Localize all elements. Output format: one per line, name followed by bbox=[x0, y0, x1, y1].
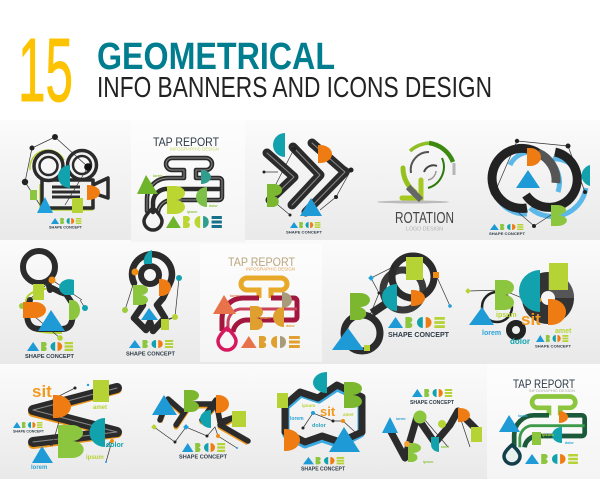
logo row bbox=[241, 336, 300, 348]
logo row bbox=[27, 342, 73, 351]
panel: S ribbon: ipsum bbox=[86, 455, 104, 461]
panel: camera icon bbox=[22, 134, 108, 230]
panel: interlocked circles bbox=[489, 139, 590, 236]
caption: SHAPE CONCEPT bbox=[126, 352, 176, 358]
logo row bbox=[51, 218, 81, 224]
panel: tap report warm: dolor bbox=[286, 324, 295, 328]
big number 15: 15 bbox=[18, 21, 73, 121]
subheading: INFO BANNERS AND ICONS DESIGN bbox=[97, 72, 492, 104]
caption: SHAPE CONCEPT bbox=[13, 428, 44, 434]
panel: hexagon frame: amet bbox=[343, 412, 354, 417]
panel: tap report green: dolor bbox=[209, 204, 218, 208]
panel: chevrons bbox=[262, 133, 354, 234]
panel: pie ring: sit bbox=[521, 310, 541, 329]
caption: SHAPE CONCEPT bbox=[388, 332, 450, 339]
panel: S ribbon: sit bbox=[32, 382, 52, 401]
panel: S ribbon: lorem bbox=[31, 465, 47, 471]
panel: pie ring: lorem bbox=[482, 330, 501, 337]
caption: SHAPE CONCEPT bbox=[286, 230, 323, 234]
panel: tap report blue green: dolor bbox=[565, 441, 574, 445]
caption: SHAPE CONCEPT bbox=[301, 466, 345, 472]
tap pipe bbox=[514, 397, 585, 447]
caption: SHAPE CONCEPT bbox=[25, 354, 75, 360]
logo row bbox=[13, 422, 42, 428]
panel: wave: ipsum bbox=[423, 460, 433, 464]
panel: key shape bbox=[122, 250, 182, 358]
caption: SHAPE CONCEPT bbox=[49, 224, 83, 230]
logo row bbox=[290, 222, 320, 228]
logo row bbox=[388, 317, 445, 328]
panel: tap report warm: lorem bbox=[230, 294, 240, 298]
panel: tap report green bbox=[137, 135, 222, 230]
panel: pie ring: ipsum bbox=[496, 312, 517, 319]
panel: pie ring bbox=[465, 263, 574, 348]
logo row bbox=[412, 389, 452, 397]
logo row bbox=[129, 340, 173, 348]
panel: wave: amet bbox=[441, 445, 450, 449]
panel: ring and rounded body bbox=[19, 251, 88, 360]
panel: zigzag bbox=[151, 390, 248, 460]
panel: hexagon frame: sit bbox=[320, 404, 336, 419]
heading: geometrical: GEOMETRICAL bbox=[97, 36, 335, 78]
header bbox=[18, 21, 492, 121]
subtitle: INFOGRAPHIC DESIGN bbox=[246, 266, 295, 272]
subtitle: INFOGRAPHIC DESIGN bbox=[529, 388, 575, 393]
title: TAP REPORT bbox=[513, 379, 575, 391]
panel: hexagon frame: lorem bbox=[290, 416, 304, 422]
logo row bbox=[536, 335, 568, 342]
logo row bbox=[166, 216, 222, 228]
panel: hexagon frame: dolor bbox=[312, 423, 327, 429]
panel: pie ring: amet bbox=[555, 328, 572, 335]
panel: tap report green: ipsum bbox=[187, 210, 197, 214]
panel: rotation logo bbox=[377, 143, 454, 232]
panel: tap report warm bbox=[213, 255, 300, 350]
icon: water drop bbox=[504, 445, 520, 464]
logo row bbox=[182, 443, 225, 452]
panel: chain links bbox=[332, 256, 452, 351]
panel: S ribbon bbox=[13, 380, 124, 471]
panel: tap report blue green: lorem bbox=[518, 414, 528, 418]
logo row bbox=[303, 457, 344, 464]
panel: tap report blue green bbox=[499, 379, 585, 464]
panel: wave bbox=[382, 389, 482, 464]
panel: S ribbon: amet bbox=[93, 405, 107, 411]
subtitle: LOGO DESIGN bbox=[406, 226, 443, 232]
tap pipe bbox=[147, 158, 222, 212]
panel: wave: lorem bbox=[396, 417, 406, 421]
panel: hexagon frame: ipsum bbox=[302, 403, 315, 408]
panel: pie ring: dolor bbox=[510, 337, 530, 346]
title: TAP REPORT bbox=[228, 255, 296, 269]
panel: tap report green: lorem bbox=[153, 174, 163, 178]
subtitle: INFOGRAPHIC DESIGN bbox=[170, 146, 219, 152]
caption: SHAPE CONCEPT bbox=[410, 400, 454, 406]
icon: water drop bbox=[218, 328, 236, 350]
panel: hexagon frame bbox=[277, 372, 362, 472]
logo row bbox=[490, 224, 523, 230]
logo row bbox=[525, 454, 578, 464]
tap pipe bbox=[222, 278, 297, 332]
icon: water drop bbox=[144, 208, 162, 230]
panel: S ribbon: dolor bbox=[106, 442, 124, 449]
caption: SHAPE CONCEPT bbox=[489, 231, 526, 236]
caption: SHAPE CONCEPT bbox=[179, 454, 228, 460]
caption: SHAPE CONCEPT bbox=[535, 344, 572, 348]
title: ROTATION bbox=[395, 210, 454, 227]
panel: tap report warm: ipsum bbox=[260, 316, 270, 320]
panel: tap report blue green: ipsum bbox=[542, 432, 554, 437]
title: TAP REPORT bbox=[153, 135, 220, 149]
panel backgrounds bbox=[0, 120, 600, 479]
